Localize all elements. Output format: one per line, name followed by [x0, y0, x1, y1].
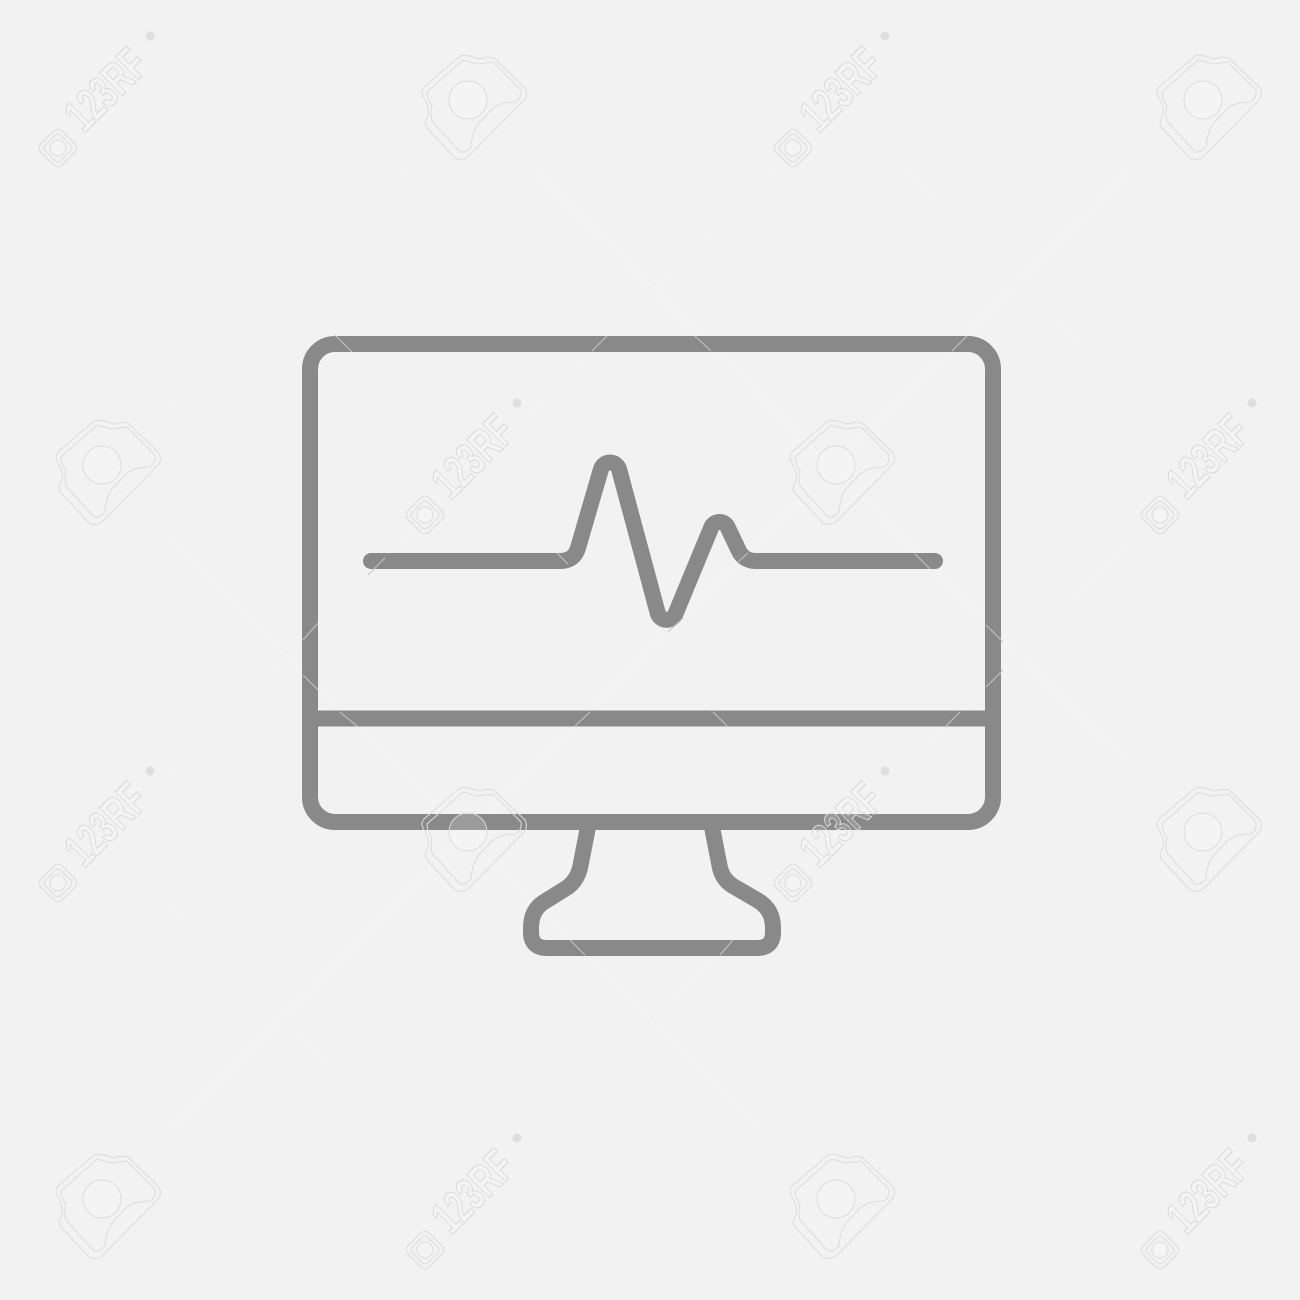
watermark: 123RF third row centre	[772, 766, 893, 904]
watermark: 123RF second row right: 123RF	[1156, 404, 1260, 508]
watermark emblem: egg third row centre	[422, 787, 526, 892]
watermark: 123RF bottom row right: 123RF	[1156, 1139, 1260, 1243]
watermark: 123RF top centre	[772, 32, 893, 169]
watermark: 123RF top centre: 123RF	[789, 37, 893, 141]
watermark: 123RF bottom row right	[1139, 1134, 1260, 1271]
watermark: 123RF second row left	[404, 398, 525, 536]
watermark: 123RF second row left: 123RF	[421, 404, 525, 508]
monitor chin divider	[310, 710, 993, 726]
watermark: 123RF third row left: 123RF	[54, 772, 158, 876]
watermark: 123RF second row right	[1139, 398, 1260, 536]
watermark: 123RF top left	[37, 32, 158, 169]
monitor screen frame	[310, 344, 993, 822]
watermark emblem: egg bottom left	[56, 1154, 160, 1258]
watermark emblem: egg top centre	[422, 55, 526, 160]
icon: monitor with heartbeat	[310, 344, 993, 948]
watermark emblem: egg second row left	[56, 420, 160, 524]
watermark: 123RF bottom row left: 123RF	[421, 1139, 525, 1243]
watermark: 123RF third row left	[37, 766, 158, 904]
watermark: 123RF top left: 123RF	[54, 37, 158, 141]
watermark emblem: egg third row right	[1157, 787, 1262, 892]
watermark emblem: egg second row centre	[790, 420, 894, 524]
monitor stand	[531, 822, 773, 948]
watermark: 123RF bottom row left	[404, 1134, 525, 1271]
watermark emblem: egg top right	[1157, 55, 1262, 160]
watermark: 123RF third row centre: 123RF	[789, 772, 893, 876]
heartbeat pulse line	[371, 463, 935, 620]
watermark emblem: egg bottom centre	[790, 1154, 894, 1258]
